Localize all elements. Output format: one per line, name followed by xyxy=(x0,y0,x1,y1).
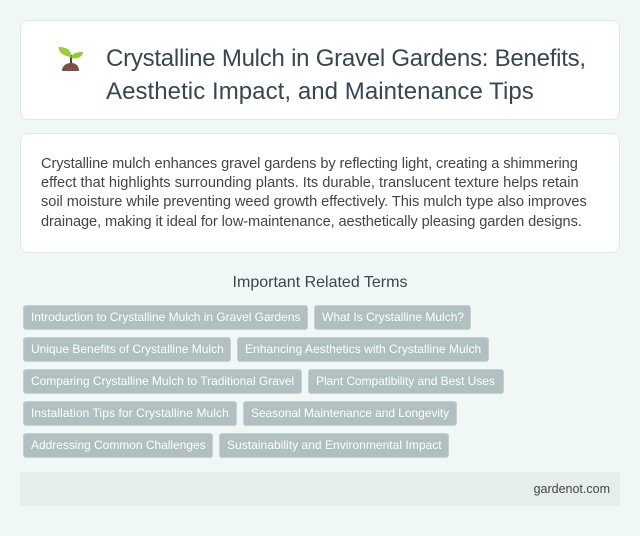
title: Aesthetic Impact, and Maintenance Tips xyxy=(106,78,534,105)
tag: Enhancing Aesthetics with Crystalline Mulch xyxy=(245,342,481,356)
summary text: Crystalline mulch enhances gravel gardens by reflecting light, creating a shimmering xyxy=(41,156,578,172)
tag list xyxy=(23,305,504,458)
summary text: drainage, making it ideal for low-maintenance, aesthetically pleasing garden designs. xyxy=(41,214,582,230)
panel: summary card xyxy=(20,133,620,253)
summary text xyxy=(41,156,587,230)
summary text: soil moisture while preventing weed growth effectively. This mulch type also improves xyxy=(41,194,587,210)
tag: Sustainability and Environmental Impact xyxy=(227,438,442,452)
tag: Installation Tips for Crystalline Mulch xyxy=(31,406,229,420)
tag xyxy=(308,369,504,394)
tag: Introduction to Crystalline Mulch in Gravel Gardens xyxy=(31,310,300,324)
title: Crystalline Mulch in Gravel Gardens: Benefits, xyxy=(106,45,586,72)
tag: Comparing Crystalline Mulch to Traditional Gravel xyxy=(31,374,294,388)
tag: Addressing Common Challenges xyxy=(31,438,206,452)
tag: What Is Crystalline Mulch? xyxy=(322,310,464,324)
tag: Seasonal Maintenance and Longevity xyxy=(251,406,449,420)
tag xyxy=(23,401,237,426)
tag: Plant Compatibility and Best Uses xyxy=(316,374,495,388)
icon: seedling xyxy=(58,47,83,71)
tag xyxy=(243,401,457,426)
tag xyxy=(23,337,231,362)
tag xyxy=(219,433,449,458)
panel: title card xyxy=(20,20,620,120)
heading: related terms: Important Related Terms xyxy=(233,274,407,291)
tag xyxy=(23,305,308,330)
footer source text: gardenot.com xyxy=(534,482,610,496)
summary text: effect that highlights surrounding plants. Its durable, translucent texture helps retain xyxy=(41,175,579,191)
tag xyxy=(23,369,302,394)
tag xyxy=(314,305,471,330)
tag xyxy=(237,337,489,362)
tag: Unique Benefits of Crystalline Mulch xyxy=(31,342,224,356)
footer bar xyxy=(20,472,620,506)
title xyxy=(106,45,586,105)
tag xyxy=(23,433,213,458)
